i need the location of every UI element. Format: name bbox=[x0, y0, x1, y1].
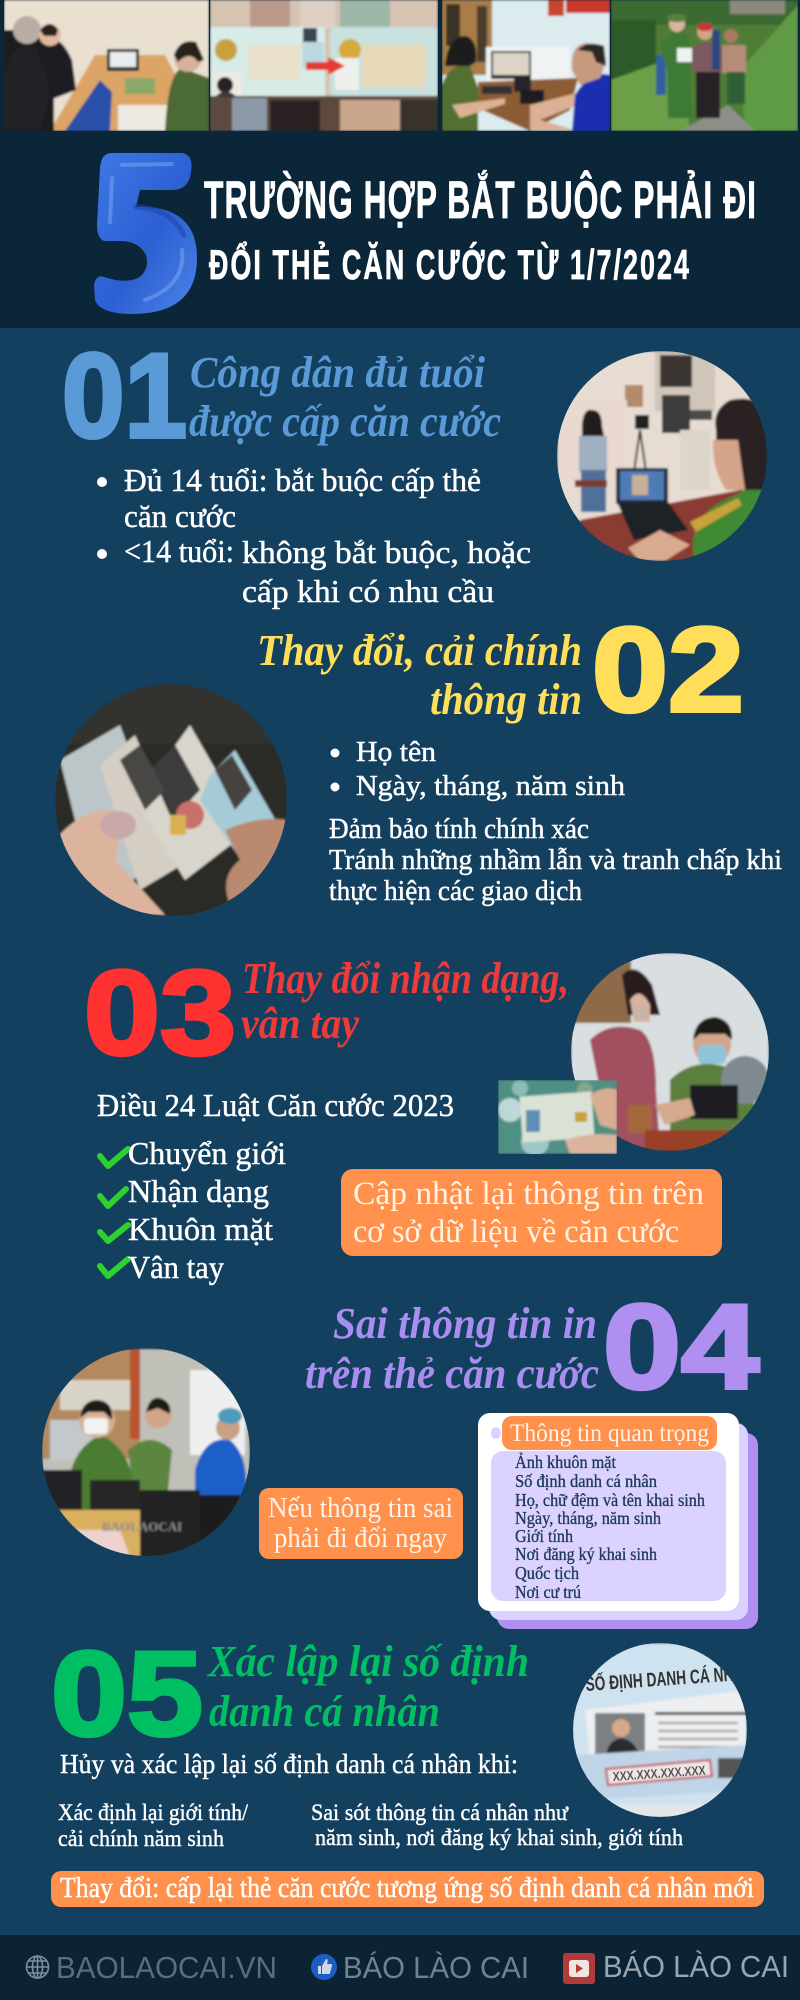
icon: facebook like bbox=[311, 1954, 337, 1980]
bullet list 02: Họ tên bbox=[356, 736, 437, 768]
icon: youtube bbox=[563, 1953, 595, 1984]
heading 02 bbox=[257, 626, 582, 724]
icon: green checks bbox=[100, 1149, 128, 1276]
heading 04: Sai thông tin in bbox=[333, 1299, 597, 1348]
card list: Họ, chữ đệm và tên khai sinh bbox=[515, 1490, 705, 1510]
checklist: Chuyển giới bbox=[128, 1135, 286, 1171]
bullet list 01: cấp khi có nhu cầu bbox=[242, 573, 494, 609]
card list: Ngày, tháng, năm sinh bbox=[515, 1508, 661, 1528]
heading 03: Thay đổi nhận dạng, bbox=[242, 954, 569, 1003]
card list bbox=[515, 1452, 705, 1602]
heading 05 bbox=[206, 1637, 529, 1736]
heading 01: Công dân đủ tuổi bbox=[190, 348, 486, 397]
subheading 05: Hủy và xác lập lại số định danh cá nhân khi: bbox=[60, 1749, 518, 1779]
callout: update database bbox=[341, 1169, 722, 1256]
heading 02: Thay đổi, cải chính bbox=[257, 626, 582, 675]
number 02: 02 bbox=[592, 603, 744, 737]
number 01: 01 bbox=[62, 329, 187, 463]
text block 02: Tránh những nhầm lẫn và tranh chấp khi bbox=[329, 844, 782, 876]
header photo strip bbox=[0, 0, 800, 131]
checklist: Vân tay bbox=[128, 1249, 224, 1285]
card list: Nơi đăng ký khai sinh bbox=[515, 1544, 657, 1564]
bullet list 01: Đủ 14 tuổi: bắt buộc cấp thẻ bbox=[124, 462, 481, 498]
text: gender correction: cải chính năm sinh bbox=[58, 1826, 224, 1851]
text: personal info errors: năm sinh, nơi đăng ký khai sinh, giới tính bbox=[315, 1825, 683, 1850]
title band bbox=[0, 131, 800, 328]
heading 01: được cấp căn cước bbox=[189, 397, 501, 446]
icon: big blue balloon number 5 bbox=[94, 153, 197, 314]
bullet list 02: Ngày, tháng, năm sinh bbox=[356, 770, 626, 802]
card list: Giới tính bbox=[515, 1526, 573, 1546]
photo: officers with citizen: BAOLAOCAI bbox=[102, 1519, 182, 1534]
text: personal info errors bbox=[311, 1800, 683, 1850]
card list: Số định danh cá nhân bbox=[515, 1471, 657, 1491]
photo: officer at computer bbox=[442, 0, 610, 131]
law reference: Điều 24 Luật Căn cước 2023 bbox=[97, 1087, 454, 1123]
photo: old and new ID cards bbox=[210, 0, 438, 131]
photo: officers on hillside bbox=[611, 0, 798, 131]
heading 05: danh cá nhân bbox=[209, 1687, 440, 1736]
callout: if info wrong: phải đi đổi ngay bbox=[274, 1523, 447, 1554]
heading 04: trên thẻ căn cước bbox=[305, 1349, 599, 1398]
title line 2: ĐỔI THẺ CĂN CƯỚC TỪ 1/7/2024 bbox=[209, 241, 689, 289]
text block 02 bbox=[329, 813, 782, 907]
heading 03 bbox=[241, 954, 569, 1048]
section 03 bbox=[84, 946, 769, 1285]
number 03: 03 bbox=[84, 946, 236, 1080]
number 05: 05 bbox=[51, 1627, 203, 1761]
callout: if info wrong bbox=[259, 1488, 463, 1559]
card list: Ảnh khuôn mặt bbox=[515, 1452, 616, 1472]
photo: hand holding ID cards bbox=[55, 684, 287, 916]
facebook name: BÁO LÀO CAI bbox=[343, 1950, 529, 1985]
checklist: Nhận dạng bbox=[128, 1173, 269, 1209]
panel: important information card bbox=[478, 1413, 758, 1629]
icon: globe bbox=[26, 1956, 48, 1978]
text: gender correction: Xác định lại giới tính/ bbox=[58, 1800, 249, 1825]
text: personal info errors: Sai sót thông tin cá nhân như bbox=[311, 1800, 569, 1825]
youtube name: BÁO LÀO CAI bbox=[603, 1949, 789, 1984]
photo: officers with citizen bbox=[42, 1349, 250, 1557]
text: gender correction bbox=[58, 1800, 249, 1851]
heading 05: Xác lập lại số định bbox=[206, 1637, 529, 1686]
text block 02: Đảm bảo tính chính xác bbox=[329, 813, 589, 845]
section 04 bbox=[42, 1280, 759, 1629]
number 04: 04 bbox=[603, 1280, 759, 1414]
bullet list 01 bbox=[97, 462, 531, 609]
photo: hand holding ID card bbox=[498, 1080, 617, 1156]
photo: fingerprint scanning bbox=[571, 953, 769, 1151]
checklist: Khuôn mặt bbox=[128, 1211, 273, 1247]
photo: citizen being photographed for ID bbox=[557, 351, 767, 561]
heading 01 bbox=[189, 348, 501, 446]
text block 02: thực hiện các giao dịch bbox=[329, 875, 582, 907]
bullet list 02 bbox=[330, 736, 626, 802]
bullet list 01: không bắt buộc, hoặc bbox=[242, 534, 531, 570]
heading 04 bbox=[305, 1299, 599, 1398]
card list: Nơi cư trú bbox=[515, 1582, 581, 1602]
callout: new card issued: Thay đổi: cấp lại thẻ căn cước tương ứng số định danh cá nhân mới bbox=[60, 1873, 754, 1904]
bullet list 01: căn cước bbox=[124, 498, 236, 534]
photo: personal ID number document bbox=[572, 1643, 754, 1818]
website: BAOLAOCAI.VN bbox=[56, 1950, 277, 1985]
section 02 bbox=[55, 603, 782, 916]
bullet list 01: <14 tuổi: bbox=[124, 533, 234, 569]
callout: update database: Cập nhật lại thông tin trên bbox=[353, 1176, 704, 1212]
footer bbox=[0, 1935, 800, 2000]
photo: personal ID number document: XXX.XXX.XXX.XXX bbox=[612, 1763, 706, 1784]
title line 1: TRƯỜNG HỢP BẮT BUỘC PHẢI ĐI bbox=[204, 168, 756, 230]
heading 02: thông tin bbox=[430, 675, 582, 724]
card list: Quốc tịch bbox=[515, 1563, 579, 1583]
section 05 bbox=[51, 1627, 764, 1907]
callout: update database: cơ sở dữ liệu về căn cước bbox=[353, 1214, 679, 1250]
checklist bbox=[100, 1135, 286, 1285]
callout: if info wrong: Nếu thông tin sai bbox=[268, 1493, 453, 1524]
card heading tab: Thông tin quan trọng bbox=[510, 1420, 709, 1447]
photo: citizens at ID desk bbox=[4, 0, 209, 131]
heading 03: vân tay bbox=[241, 999, 359, 1048]
section 01 bbox=[62, 329, 767, 609]
